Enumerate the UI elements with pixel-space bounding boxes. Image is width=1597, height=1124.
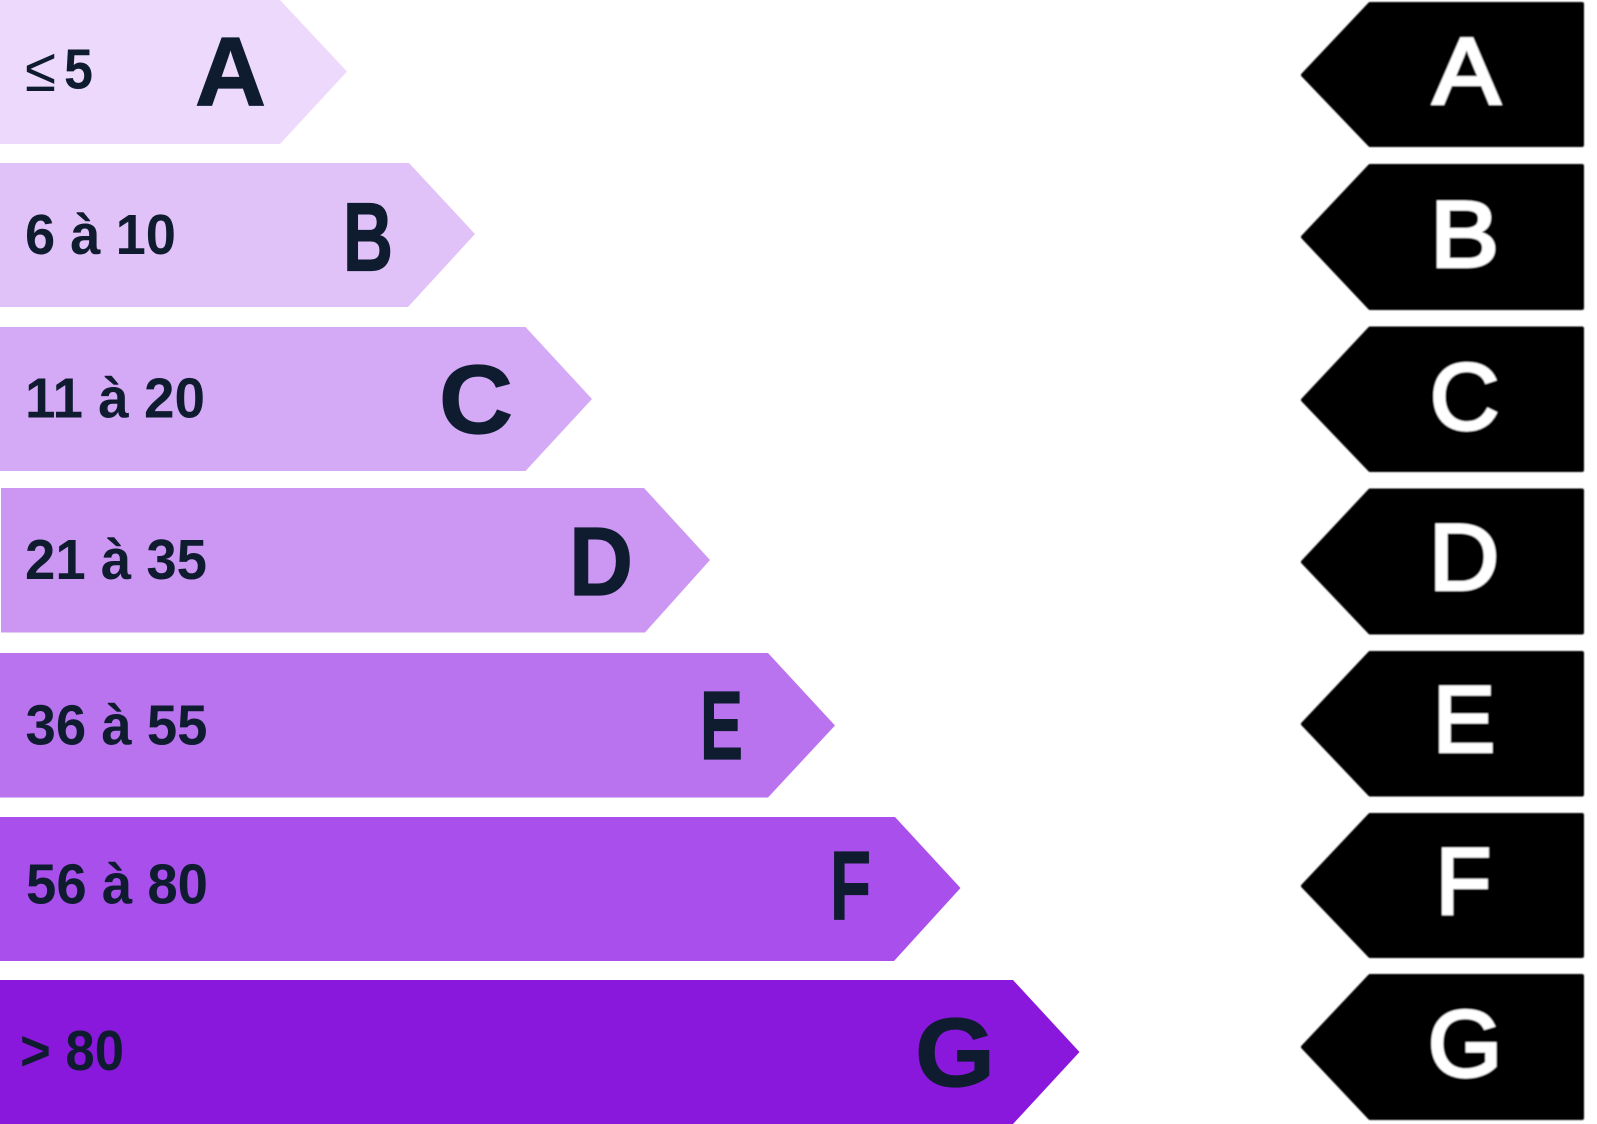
bar C: 11 to 20 xyxy=(0,327,592,471)
bar A: 5 or less xyxy=(0,0,347,144)
bar F: 56 to 80 xyxy=(0,817,960,961)
tag F xyxy=(1303,815,1582,956)
tag B xyxy=(1303,166,1582,308)
bar G: over 80: > 80 xyxy=(20,1019,124,1083)
bar F: 56 to 80: 56 à 80 xyxy=(26,852,208,916)
bar E: 36 to 55: 36 à 55 xyxy=(26,694,208,758)
bar B: 6 to 10 xyxy=(0,163,475,307)
tag G xyxy=(1303,976,1582,1118)
bar F: 56 to 80: F xyxy=(830,831,871,940)
bar D: 21 to 35: D xyxy=(569,507,633,616)
bar B: 6 to 10: B xyxy=(343,182,393,292)
tag C: C xyxy=(1430,344,1499,449)
bar G: over 80 xyxy=(0,980,1080,1124)
tag E xyxy=(1303,653,1582,794)
bar C: 11 to 20: C xyxy=(439,345,513,454)
tag G: G xyxy=(1428,991,1502,1096)
bar C: 11 to 20: 11 à 20 xyxy=(25,366,205,430)
tag F: F xyxy=(1436,828,1491,934)
bar E: 36 to 55 xyxy=(0,653,835,798)
tag C xyxy=(1303,328,1582,470)
tag A xyxy=(1303,4,1582,145)
bar G: over 80: G xyxy=(915,998,995,1107)
tag E: E xyxy=(1433,666,1495,772)
bar E: 36 to 55: E xyxy=(700,671,743,780)
tag B: B xyxy=(1430,182,1499,286)
tag D: D xyxy=(1429,504,1499,610)
tag A: A xyxy=(1433,18,1500,124)
bar A: 5 or less: 5 xyxy=(64,38,93,102)
bar A: 5 or less: A xyxy=(195,17,266,126)
bar B: 6 to 10: 6 à 10 xyxy=(25,203,176,267)
bar A: 5 or less: ≤ xyxy=(25,36,56,105)
bar D: 21 to 35 xyxy=(1,488,710,632)
bar D: 21 to 35: 21 à 35 xyxy=(25,528,207,592)
tag D xyxy=(1303,490,1582,632)
